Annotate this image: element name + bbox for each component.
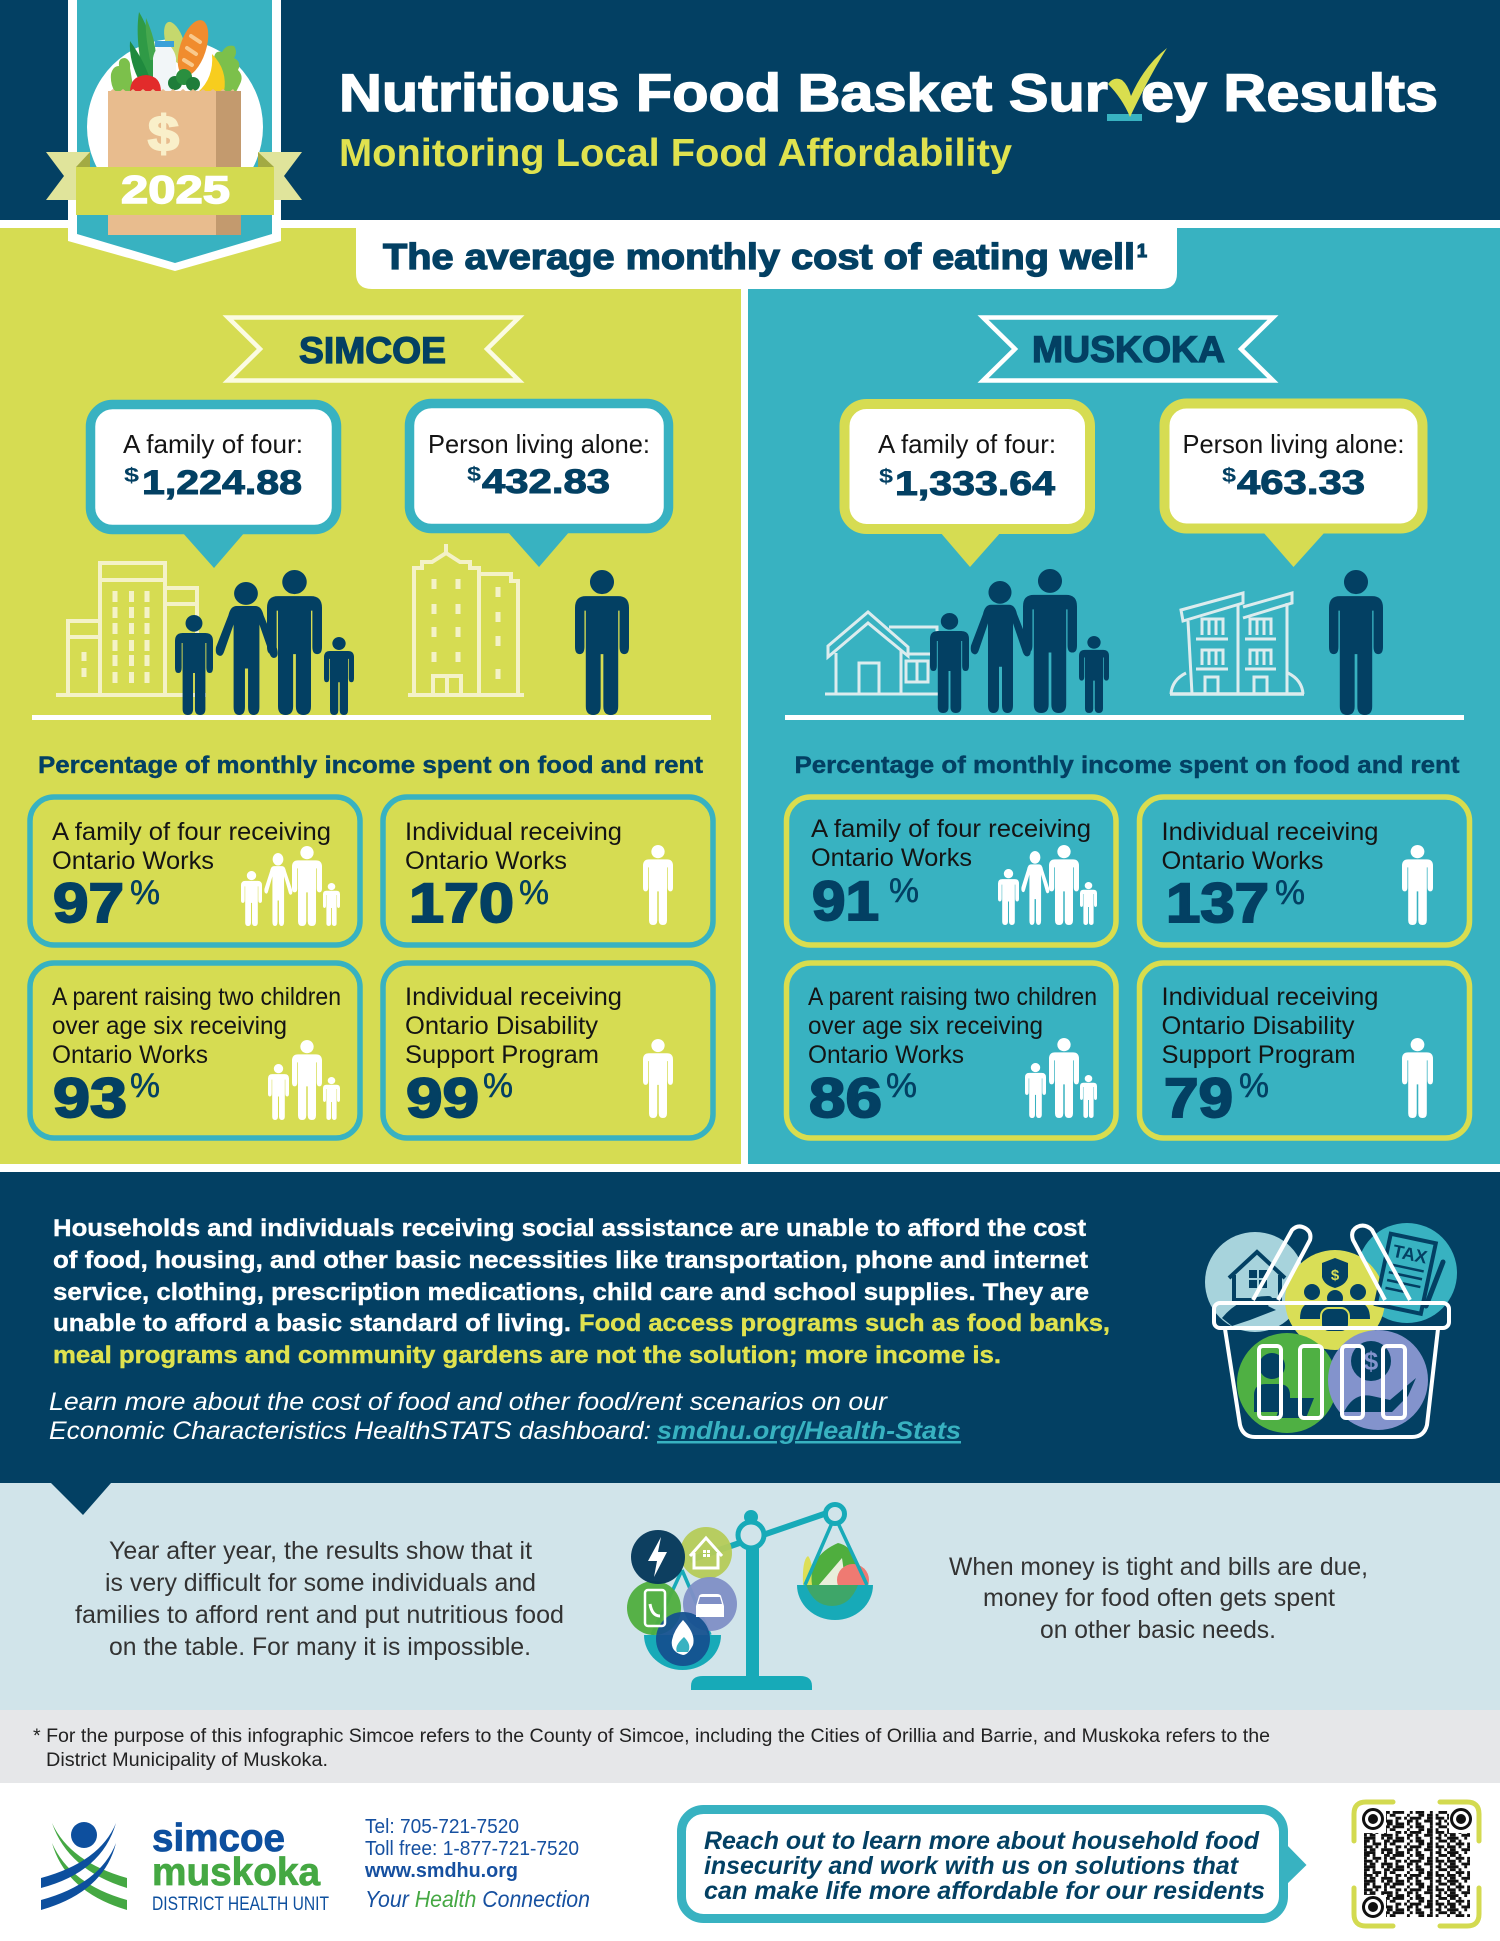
card: Simcoe individual Ontario Works: % — [519, 874, 549, 912]
card: Simcoe parent raising two children: % — [130, 1067, 160, 1105]
card: Muskoka individual Ontario Works: Ontario Works — [1162, 847, 1324, 875]
card: Simcoe parent raising two children: Ontario Works — [52, 1041, 208, 1069]
icon: Simcoe single person — [575, 570, 629, 715]
text block: when money is tight: money for food often gets spent — [983, 1584, 1335, 1612]
text block: footnote — [33, 1726, 1270, 1771]
icon: shopping basket of basic needs: TAX — [1391, 1241, 1429, 1268]
text block: contact details: Your Health Connection — [365, 1886, 590, 1912]
card: Muskoka family of four Ontario Works: Ontario Works — [811, 844, 972, 872]
callout: Simcoe family of four cost: A family of four: — [123, 429, 303, 459]
icon: shopping basket of basic needs — [1205, 1223, 1457, 1437]
callout: reach out: can make life more affordable for our residents — [704, 1877, 1265, 1905]
ground line: Muskoka — [785, 715, 1464, 720]
callout: Simcoe person living alone cost: 432.83 — [482, 463, 610, 501]
callout: Simcoe family of four cost: 1,224.88 — [142, 464, 302, 502]
text block: year after year: Year after year, the results show that it — [109, 1537, 532, 1565]
callout: Muskoka person living alone cost — [1164, 404, 1422, 567]
text block: learn more link: smdhu.org/Health-Stats — [657, 1417, 961, 1445]
callout: Simcoe family of four cost: $ — [124, 465, 139, 487]
card: Simcoe parent raising two children: over age six receiving — [52, 1012, 287, 1040]
text block: social assistance paragraph: Households and individuals receiving social assistance are unable to afford the cost — [53, 1215, 1086, 1242]
card: Simcoe individual Ontario Works: Ontario Works — [405, 847, 567, 875]
icon: shopping basket of basic needs: $ — [1331, 1267, 1340, 1284]
icon: Simcoe apartment towers — [408, 544, 524, 695]
card: Simcoe family of four Ontario Works: 97 — [53, 871, 124, 934]
card: Simcoe individual ODSP: Individual receiving — [405, 983, 622, 1011]
card: Simcoe family of four Ontario Works: Ontario Works — [52, 847, 214, 875]
callout: Simcoe person living alone cost — [410, 404, 668, 567]
card: Simcoe individual ODSP: 99 — [406, 1066, 479, 1129]
banner: Muskoka: MUSKOKA — [1032, 329, 1225, 370]
text block: footnote: * For the purpose of this infographic Simcoe refers to the County of Simcoe, including the Cities of Orillia and Barrie, and Muskoka refers to the — [33, 1726, 1270, 1747]
callout: Simcoe person living alone cost: $ — [467, 464, 481, 486]
icon: survey check mark — [1107, 48, 1167, 121]
logo: Simcoe Muskoka District Health Unit: muskoka — [152, 1851, 320, 1894]
card: Muskoka parent raising two children: over age six receiving — [808, 1012, 1043, 1040]
icon: Muskoka townhouses — [1170, 593, 1304, 694]
card: Muskoka individual Ontario Works — [1140, 797, 1470, 945]
card: Muskoka individual ODSP: % — [1239, 1067, 1269, 1105]
panel: pale blue message band — [0, 1483, 1500, 1710]
card: Simcoe individual ODSP — [383, 963, 713, 1138]
text block: social assistance paragraph: of food, housing, and other basic necessities like transportation, phone and internet — [53, 1247, 1088, 1274]
icon: shopping basket of basic needs: $ — [1364, 1346, 1379, 1376]
card: Simcoe family of four Ontario Works: % — [130, 874, 160, 912]
card: Muskoka individual Ontario Works: % — [1275, 874, 1305, 912]
text block: social assistance paragraph — [53, 1215, 1110, 1369]
panel: Muskoka background — [748, 228, 1500, 1164]
text block: social assistance paragraph: meal programs and community gardens are not the solution; more income is. — [53, 1342, 1001, 1369]
card: Muskoka individual ODSP: Support Program — [1162, 1041, 1356, 1069]
card: Simcoe family of four Ontario Works — [30, 797, 360, 945]
icon: Muskoka single person — [1329, 570, 1383, 715]
text block: year after year — [75, 1537, 564, 1661]
header band — [0, 0, 1500, 220]
tab: average monthly cost heading: 1 — [1137, 241, 1147, 261]
badge: 2025 grocery bag shield: $ — [148, 106, 179, 162]
callout: Muskoka family of four cost: A family of four: — [878, 429, 1056, 459]
card: Simcoe individual ODSP: Ontario Disability — [405, 1012, 599, 1040]
card: Simcoe parent raising two children: 93 — [53, 1066, 127, 1129]
card: Simcoe individual ODSP: Support Program — [405, 1041, 599, 1069]
icon: Muskoka house — [825, 612, 939, 694]
pointer: navy triangle — [51, 1483, 111, 1515]
card: Simcoe family of four Ontario Works: A family of four receiving — [52, 818, 331, 846]
card: Muskoka individual ODSP: Ontario Disability — [1162, 1012, 1355, 1040]
logo: Simcoe Muskoka District Health Unit — [41, 1817, 329, 1915]
text block: year after year: families to afford rent and put nutritious food — [75, 1601, 564, 1629]
icon: Muskoka family figures — [930, 569, 1109, 713]
logo: Simcoe Muskoka District Health Unit: simcoe — [152, 1817, 285, 1860]
QR code with corner brackets — [1354, 1802, 1479, 1926]
card: Muskoka individual ODSP: 79 — [1164, 1066, 1233, 1129]
card: Muskoka family of four Ontario Works: % — [889, 872, 919, 910]
card: Simcoe individual Ontario Works — [383, 797, 713, 945]
callout: Simcoe family of four cost — [90, 404, 336, 568]
card: Muskoka individual ODSP: Individual receiving — [1162, 983, 1378, 1011]
card: Muskoka individual ODSP — [1140, 963, 1470, 1138]
badge: 2025 grocery bag shield: 2025 — [121, 169, 230, 212]
icon: Simcoe city buildings — [56, 563, 206, 695]
card: Muskoka parent raising two children: A parent raising two children — [808, 983, 1097, 1011]
text block: when money is tight — [949, 1553, 1368, 1644]
callout: reach out: Reach out to learn more about household food — [704, 1827, 1260, 1855]
card: Simcoe individual ODSP: % — [483, 1067, 513, 1105]
logo: Simcoe Muskoka District Health Unit: DISTRICT HEALTH UNIT — [152, 1894, 329, 1915]
heading: Muskoka percentage: Percentage of monthly income spent on food and rent — [794, 752, 1460, 779]
text block: when money is tight: on other basic needs. — [1040, 1616, 1276, 1644]
callout: Muskoka family of four cost — [844, 404, 1090, 567]
text block: social assistance paragraph: unable to afford a basic standard of living. — [53, 1310, 571, 1337]
banner: Muskoka — [983, 318, 1273, 380]
card: Simcoe individual Ontario Works: 170 — [409, 871, 514, 934]
callout: Muskoka person living alone cost: 463.33 — [1237, 464, 1365, 502]
icon: balance scale — [627, 1504, 873, 1690]
text block: learn more link — [49, 1388, 961, 1445]
badge: 2025 grocery bag shield — [46, 0, 302, 271]
panel: Simcoe background — [0, 228, 741, 1164]
card: Simcoe parent raising two children — [30, 963, 360, 1138]
card: Muskoka parent raising two children — [786, 963, 1116, 1138]
callout: reach out: insecurity and work with us on solutions that — [704, 1852, 1240, 1880]
text block: contact details — [364, 1816, 590, 1912]
card: Simcoe parent raising two children: A parent raising two children — [52, 983, 341, 1011]
callout: Muskoka family of four cost: $ — [879, 466, 893, 488]
card: Muskoka parent raising two children: % — [886, 1067, 917, 1105]
text block: learn more link: Economic Characteristics HealthSTATS dashboard: — [49, 1417, 651, 1445]
callout: Muskoka person living alone cost: $ — [1222, 465, 1236, 487]
card: Muskoka parent raising two children: 86 — [809, 1066, 882, 1129]
heading: Simcoe percentage: Percentage of monthly income spent on food and rent — [38, 752, 703, 779]
title: Nutritious Food Basket Sur vey Results — [339, 64, 1438, 123]
card: Muskoka individual Ontario Works: Individual receiving — [1162, 818, 1378, 846]
card: Muskoka family of four Ontario Works — [786, 797, 1116, 945]
text block: contact details: Toll free: 1-877-721-7520 — [365, 1838, 579, 1860]
card: Muskoka individual Ontario Works: 137 — [1166, 871, 1269, 934]
text block: social assistance paragraph: service, clothing, prescription medications, child care and school supplies. They are — [53, 1279, 1089, 1306]
tab: average monthly cost heading — [356, 228, 1177, 289]
text block: contact details: www.smdhu.org — [364, 1860, 518, 1882]
text block: contact details: Tel: 705-721-7520 — [365, 1816, 519, 1838]
text block: year after year: on the table. For many it is impossible. — [109, 1633, 531, 1661]
panel: social assistance message — [0, 1172, 1500, 1483]
icon: Simcoe family figures — [175, 570, 354, 715]
card: Muskoka family of four Ontario Works: A family of four receiving — [811, 815, 1091, 843]
text block: year after year: is very difficult for some individuals and — [105, 1569, 536, 1597]
tab: average monthly cost heading: The average monthly cost of eating well — [383, 236, 1135, 277]
banner: Simcoe: SIMCOE — [299, 330, 446, 371]
banner: Simcoe — [228, 318, 519, 380]
callout: reach out — [682, 1810, 1306, 1918]
ground line: Simcoe — [32, 715, 711, 720]
callout: Simcoe person living alone cost: Person living alone: — [428, 429, 650, 459]
card: Muskoka family of four Ontario Works: 91 — [812, 869, 879, 932]
text block: footnote: District Municipality of Muskoka. — [46, 1750, 328, 1771]
panel: footnote strip — [0, 1710, 1500, 1783]
text block: social assistance paragraph: Food access programs such as food banks, — [579, 1310, 1110, 1337]
subtitle: Monitoring Local Food Affordability — [339, 132, 1012, 175]
text block: when money is tight: When money is tight and bills are due, — [949, 1553, 1368, 1581]
text block: learn more link: Learn more about the cost of food and other food/rent scenarios on our — [49, 1388, 889, 1416]
callout: Muskoka person living alone cost: Person living alone: — [1182, 429, 1404, 459]
card: Simcoe individual Ontario Works: Individual receiving — [405, 818, 622, 846]
card: Muskoka parent raising two children: Ontario Works — [808, 1041, 964, 1069]
callout: Muskoka family of four cost: 1,333.64 — [895, 465, 1055, 503]
